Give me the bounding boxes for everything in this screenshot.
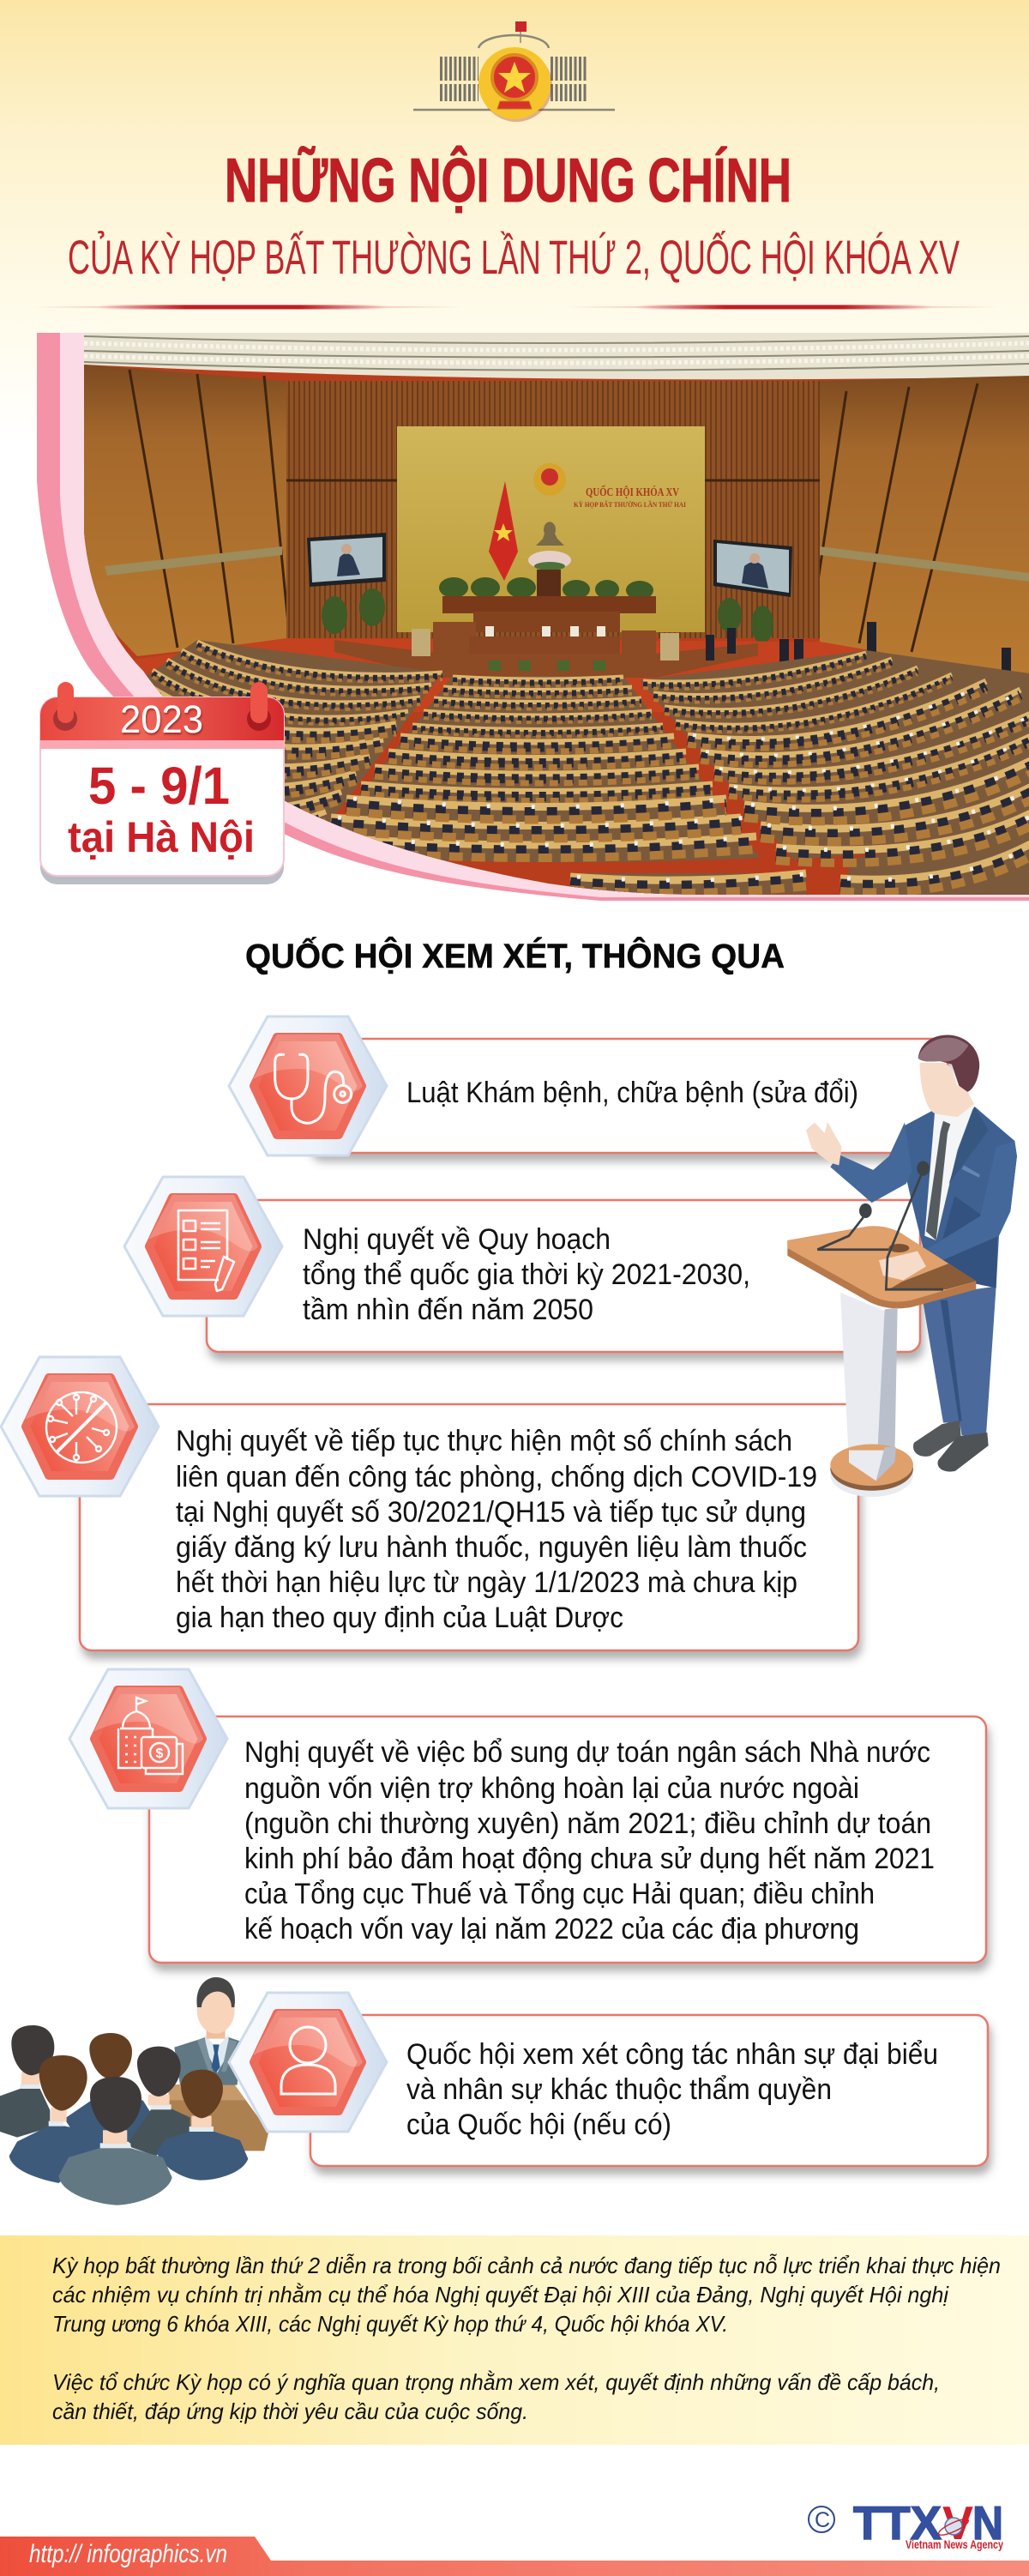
person back left (0, 2025, 54, 2138)
pink ribbon behind photo (37, 333, 1029, 901)
icon: National Assembly building with emblem (413, 21, 615, 122)
panel: item 5 personnel: Quốc hội xem xét công tác nhân sự đại biểu (406, 2038, 938, 2071)
lectern base (830, 1453, 913, 1497)
shirt (924, 1104, 975, 1240)
panel: item 3 COVID-19 resolution: Nghị quyết về tiếp tục thực hiện một số chính sách (176, 1425, 792, 1457)
logo: TTXVN (809, 2496, 1003, 2551)
panel: item 4 budget resolution (149, 1716, 986, 1963)
calendar: date card: 2023 (120, 697, 203, 741)
icon: checklist hexagon (124, 1177, 282, 1316)
hall emblem and wall caption: QUỐC HỘI KHÓA XV (586, 484, 679, 499)
panel: item 3 COVID-19 resolution: giấy đăng ký lưu hành thuốc, nguyên liệu làm thuốc (176, 1531, 807, 1564)
shoes (913, 1421, 961, 1457)
lapel (949, 1107, 989, 1184)
icon: person hexagon (229, 1993, 387, 2132)
footer bar: http:// infographics.vn (29, 2540, 227, 2568)
person right (157, 2070, 248, 2181)
jacket back (903, 1107, 1017, 1288)
icon: state budget hexagon (69, 1669, 227, 1808)
panel: context note: cần thiết, đáp ứng kịp thời yêu cầu của cuộc sống. (52, 2398, 528, 2424)
panel: item 3 COVID-19 resolution: tại Nghị quyết số 30/2021/QH15 và tiếp tục sử dụng (176, 1496, 806, 1529)
screens (307, 533, 792, 597)
panel: item 1 law (309, 1039, 948, 1153)
person front (58, 2077, 172, 2205)
flag (489, 481, 518, 581)
panel: context note: Trung ương 6 khóa XIII, các Nghị quyết Kỳ họp thứ 4, Quốc hội khóa XV. (52, 2311, 728, 2337)
panel: context note: các nhiệm vụ chính trị nhằm cụ thể hóa Nghị quyết Đại hội XIII của Đảng, Nghị quyết Hội nghị (52, 2282, 949, 2308)
hall emblem and wall caption (533, 463, 686, 509)
seat blocks base (129, 640, 1029, 896)
footer bar (0, 2537, 1029, 2576)
icon: virus ban hexagon (1, 1357, 159, 1496)
logo: TTXVN: V (942, 2496, 973, 2549)
panel: item 4 budget resolution: kế hoạch vốn vay lại năm 2022 của các địa phương (244, 1913, 859, 1946)
logo: TTXVN: N (972, 2496, 1003, 2549)
hand on lectern (879, 1252, 926, 1280)
logo: TTXVN: C (815, 2508, 830, 2532)
raised arm (830, 1123, 912, 1203)
panel: item 3 COVID-19 resolution: gia hạn theo quy định của Luật Dược (176, 1602, 623, 1634)
side walls (84, 365, 286, 656)
stage (84, 596, 1029, 712)
back wall (286, 381, 820, 638)
tie (926, 1121, 950, 1240)
panel: context note: Kỳ họp bất thường lần thứ 2 diễn ra trong bối cảnh cả nước đang tiếp tục nỗ lực triển khai thực hiện (52, 2253, 1001, 2278)
ceiling (84, 333, 1029, 379)
panel: item 4 budget resolution: nguồn vốn viện trợ không hoàn lại của nước ngoài (244, 1772, 859, 1805)
calendar: date card: 5 - 9/1 (88, 757, 230, 815)
panel: item 4 budget resolution: kinh phí bảo đảm hoạt động chưa sử dụng hết năm 2021 (244, 1843, 935, 1875)
lectern top (787, 1226, 976, 1308)
raised hand (806, 1122, 842, 1166)
person centre right (129, 2047, 190, 2156)
title (68, 146, 960, 284)
icon: stethoscope hexagon (229, 1017, 387, 1155)
icon: audience and presenter (0, 1977, 268, 2205)
photo: National Assembly hall (84, 333, 1029, 899)
calendar: date card (40, 682, 284, 884)
delegates: near rows (316, 681, 1029, 893)
microphones (817, 1161, 943, 1289)
delegates: middle rows (154, 679, 1029, 820)
panel: item 3 COVID-19 resolution: liên quan đến công tác phòng, chống dịch COVID-19 (176, 1461, 817, 1493)
panel: item 3 COVID-19 resolution: hết thời hạn hiệu lực từ ngày 1/1/2023 mà chưa kịp (176, 1566, 797, 1599)
lectern column (840, 1293, 885, 1481)
panel: item 3 COVID-19 resolution (80, 1404, 858, 1650)
panel: context note: Việc tổ chức Kỳ họp có ý nghĩa quan trọng nhằm xem xét, quyết định những vấn đề cấp bách, (52, 2369, 940, 2395)
panel: context note (0, 2235, 1029, 2445)
person left (9, 2055, 101, 2183)
logo: TTXVN: TTX (853, 2496, 942, 2549)
title: NHỮNG NỘI DUNG CHÍNH (225, 146, 791, 215)
heading: QUỐC HỘI XEM XÉT, THÔNG QUA (245, 936, 785, 975)
panel: item 5 personnel (310, 2015, 988, 2166)
panel: item 2 resolution on national plan: tổng thể quốc gia thời kỳ 2021-2030, (303, 1258, 750, 1291)
icon: state budget hexagon: $ (156, 1746, 164, 1761)
presenter (174, 1977, 242, 2085)
icon: speaker at the podium (787, 1035, 1017, 1497)
lectern (169, 2084, 268, 2151)
hair (918, 1035, 979, 1092)
panel: item 2 resolution on national plan: tầm nhìn đến năm 2050 (303, 1294, 593, 1326)
panel: item 2 resolution on national plan: Nghị quyết về Quy hoạch (303, 1223, 611, 1256)
calendar: date card: tại Hà Nội (68, 813, 255, 861)
person back centre (64, 2033, 157, 2151)
plants (322, 577, 773, 643)
face and neck (920, 1063, 974, 1117)
hall emblem and wall caption: KỲ HỌP BẤT THƯỜNG LẦN THỨ HAI (574, 500, 686, 509)
bust and flowers (528, 522, 571, 599)
lowered arm (919, 1141, 1017, 1268)
panel: item 4 budget resolution: (nguồn chi thường xuyên) năm 2021; điều chỉnh dự toán (244, 1807, 931, 1840)
delegates: far rows (153, 642, 952, 736)
panel: item 5 personnel: của Quốc hội (nếu có) (406, 2108, 671, 2141)
panel: item 4 budget resolution: Nghị quyết về việc bổ sung dự toán ngân sách Nhà nước (244, 1736, 930, 1769)
header background (0, 0, 1029, 446)
panel: item 4 budget resolution: của Tổng cục Thuế và Tổng cục Hải quan; điều chỉnh (244, 1878, 875, 1910)
panel: item 2 resolution on national plan (207, 1200, 920, 1352)
trousers (924, 1287, 996, 1436)
panel: item 1 law: Luật Khám bệnh, chữa bệnh (sửa đổi) (406, 1077, 858, 1109)
panel: item 5 personnel: và nhân sự khác thuộc thẩm quyền (406, 2073, 832, 2106)
